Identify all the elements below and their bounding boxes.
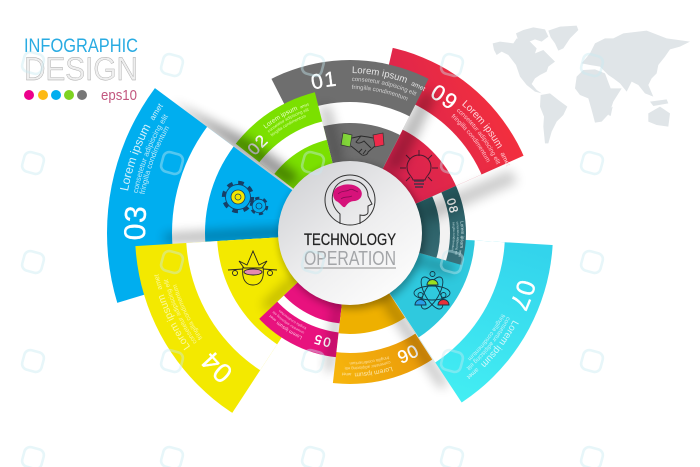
- panel 09 red: [382, 48, 524, 204]
- icon: airplane: [228, 251, 277, 285]
- world map: [493, 26, 690, 143]
- text 05: 05: [314, 335, 330, 347]
- text 03: [120, 104, 170, 240]
- text 04: fringilla condimentum: [173, 284, 202, 340]
- text 07: [466, 280, 535, 379]
- colour dots: [24, 90, 87, 100]
- text 04: [154, 274, 232, 382]
- text 06: Lorem ipsumamet: [342, 366, 393, 376]
- text 06: fringilla condimentum: [350, 356, 390, 365]
- text 09: [432, 85, 510, 166]
- text 03: fringilla condimentum: [139, 126, 170, 194]
- text 04: Lorem ipsumamet: [154, 274, 190, 350]
- text 05: fringilla condimentum: [279, 310, 306, 330]
- panel 08 teal: [414, 186, 466, 280]
- text 04: 04: [201, 352, 232, 382]
- text 02: [248, 103, 309, 154]
- text 09: Lorem ipsum amet: [462, 100, 510, 166]
- icon: head with brain: [325, 175, 375, 225]
- center circle: [278, 161, 425, 309]
- panel 02 green: [236, 92, 345, 189]
- panel 07 cyan: [378, 240, 553, 402]
- text 08: fringilla condimentum: [452, 222, 456, 250]
- text 05: [269, 310, 330, 347]
- text 09: 09: [432, 85, 456, 108]
- text 02: 02: [248, 135, 268, 154]
- shadow: red panel edge: [420, 170, 518, 222]
- text 01: Lorem ipsumamet: [352, 66, 426, 92]
- text 09: fringilla condimentum: [452, 114, 490, 162]
- text 01: fringilla condimentum: [352, 84, 408, 100]
- text 03: 03: [124, 207, 146, 240]
- text 07: fringilla condimentum: [468, 314, 506, 360]
- text 08: consetetur adipiscing elit: [454, 222, 459, 255]
- panel 01 gray: [272, 60, 440, 176]
- text 08: 08: [447, 198, 458, 213]
- icon: handshake: [341, 133, 384, 155]
- text: technology: TECHNOLOGY: [304, 231, 396, 249]
- title: [24, 36, 138, 104]
- underline: [304, 268, 396, 269]
- text 05: Lorem ipsumamet: [269, 314, 302, 340]
- text 05: consetetur adipiscing elit: [272, 311, 304, 334]
- text 06: 06: [398, 345, 418, 363]
- text 01: consetetur adipiscing elit: [352, 78, 417, 96]
- text 09: consetetur adipiscing elit: [457, 109, 500, 164]
- heading: infographic: INFOGRAPHIC: [24, 36, 138, 57]
- text 07: 07: [512, 280, 535, 312]
- icon: atom: [414, 272, 450, 312]
- text 03: consetetur adipiscing elit: [134, 114, 168, 193]
- text 08: [447, 198, 464, 257]
- text 08: Lorem ipsum amet: [458, 222, 464, 257]
- watermark marks: [21, 51, 604, 467]
- text 07: consetetur adipiscing elit: [466, 317, 510, 370]
- text 02: Lorem ipsumamet: [263, 103, 309, 128]
- icon: gears: [224, 182, 267, 214]
- text: operation: OPERATION: [304, 247, 396, 270]
- text 04: consetetur adipiscing elit: [164, 279, 196, 344]
- text 02: fringilla condimentum: [270, 115, 306, 136]
- text 01: [312, 66, 426, 100]
- panel 05 pink: [259, 274, 342, 358]
- text 03: Lorem ipsumamet: [120, 104, 164, 190]
- panel 03 blue: [107, 88, 304, 303]
- text 07: Lorem ipsumamet: [466, 320, 519, 379]
- text 02: consetetur adipiscing elit: [268, 108, 309, 132]
- panel 06 orange: [320, 293, 432, 384]
- panel 04 yellow: [135, 221, 298, 413]
- icon: light bulb: [400, 150, 438, 187]
- eps label: eps10: [101, 87, 137, 104]
- text 01: 01: [312, 72, 336, 89]
- text 06: consetetur adipiscing elit: [344, 361, 390, 370]
- text 06: [342, 345, 418, 376]
- heading: design: DESIGN: [24, 51, 138, 87]
